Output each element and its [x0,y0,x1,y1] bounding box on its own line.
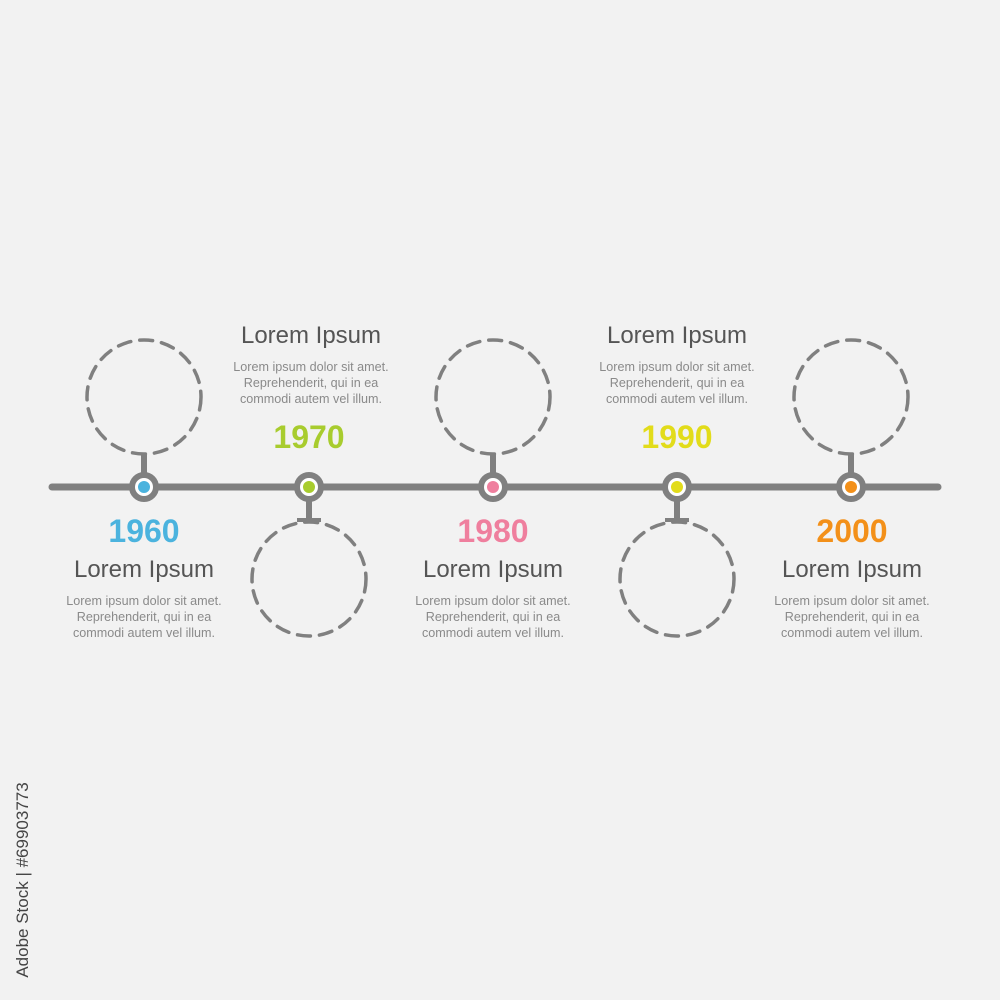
milestone 1990: Lorem ipsum dolor sit amet. [599,360,755,374]
milestone 2000: Lorem ipsum dolor sit amet. [774,594,930,608]
timeline line [52,484,938,490]
milestone 1960: 1960 [108,513,180,549]
milestone 1970: Reprehenderit, qui in ea [244,376,378,390]
icon placeholder circle 1980 [436,340,550,454]
milestone 1960 [66,340,222,640]
icon placeholder circle 1990 [620,522,734,636]
milestone 1960: Lorem Ipsum [74,556,214,583]
milestone 1960: Lorem ipsum dolor sit amet. [66,594,222,608]
milestone 1960: Reprehenderit, qui in ea [77,610,211,624]
milestone 1980: Lorem ipsum dolor sit amet. [415,594,571,608]
icon placeholder circle 2000 [794,340,908,454]
milestone 1960: commodi autem vel illum. [73,626,215,640]
milestone 1970: 1970 [273,419,345,455]
icon placeholder circle 1970 [252,522,366,636]
milestone 1970 [233,322,389,636]
milestone 1980: commodi autem vel illum. [422,626,564,640]
milestone 1970: Lorem ipsum dolor sit amet. [233,360,389,374]
milestone 1990 [599,322,755,636]
icon placeholder circle 1960 [87,340,201,454]
milestone 2000: Lorem Ipsum [782,556,922,583]
milestone 2000: Reprehenderit, qui in ea [785,610,919,624]
stock id text: Adobe Stock | #69903773 [13,782,32,978]
milestone 1990: 1990 [641,419,713,455]
milestone 1990: commodi autem vel illum. [606,392,748,406]
milestone 1980 [415,340,571,640]
milestone 1990: Lorem Ipsum [607,322,747,349]
milestone 2000: commodi autem vel illum. [781,626,923,640]
milestone 1970: commodi autem vel illum. [240,392,382,406]
milestone 1980: Reprehenderit, qui in ea [426,610,560,624]
milestone 1970: Lorem Ipsum [241,322,381,349]
milestone 2000 [774,340,930,640]
milestone 1990: Reprehenderit, qui in ea [610,376,744,390]
milestone 1980: 1980 [457,513,529,549]
milestone 2000: 2000 [816,513,888,549]
milestone 1980: Lorem Ipsum [423,556,563,583]
